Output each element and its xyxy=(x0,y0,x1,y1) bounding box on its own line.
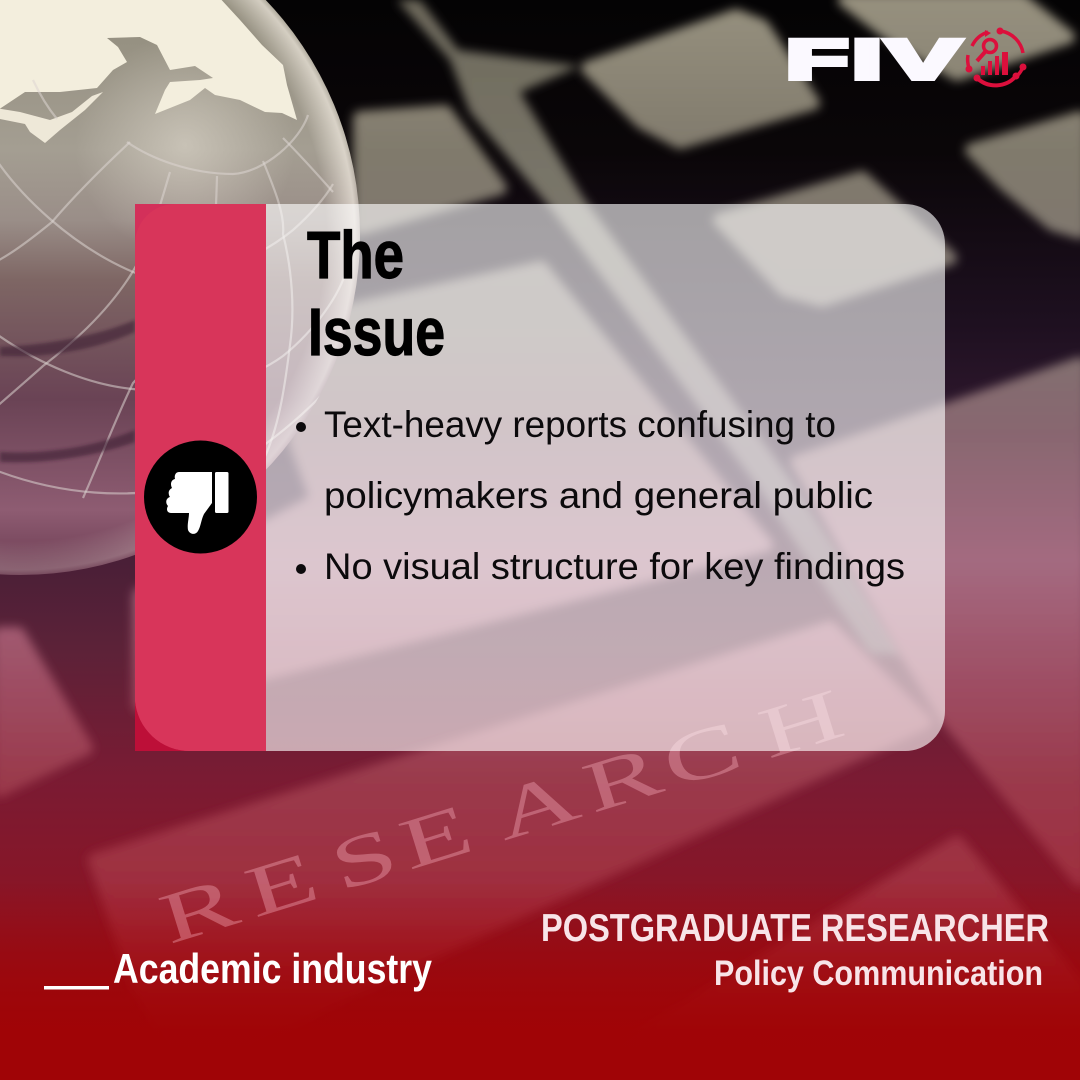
panel: translucent card body xyxy=(266,204,945,751)
panel: the issue xyxy=(135,204,945,751)
logo wordmark xyxy=(786,28,960,90)
footer: role and topic xyxy=(541,907,1049,993)
heading: Issue xyxy=(308,295,445,370)
heading: The xyxy=(307,218,404,293)
bullet list: Text-heavy reports confusing to xyxy=(324,404,836,445)
footer: industry label: Academic industry xyxy=(113,945,433,992)
keyboard key lettering: RESEARCH: RESEARCH xyxy=(150,673,853,959)
bullet list: No visual structure for key findings xyxy=(324,546,905,587)
icon: thumbs down xyxy=(144,440,257,554)
panel: crimson side strip xyxy=(135,204,266,751)
globe bright rim xyxy=(0,0,360,575)
logo wordmark: F xyxy=(786,28,848,90)
glass globe xyxy=(0,0,360,575)
globe landmass xyxy=(0,0,297,120)
bullet list: policymakers and general public xyxy=(324,475,873,516)
bullet list xyxy=(296,404,905,587)
logo wordmark: I xyxy=(852,28,882,90)
logo wordmark: V xyxy=(886,28,960,90)
logo xyxy=(786,28,1026,90)
globe peninsula xyxy=(0,92,103,143)
footer: role and topic: Policy Communication xyxy=(714,954,1043,993)
globe dark shadow streaks xyxy=(0,320,135,462)
globe grid lines xyxy=(0,80,344,498)
heading xyxy=(307,218,445,370)
logo icon xyxy=(966,28,1026,85)
